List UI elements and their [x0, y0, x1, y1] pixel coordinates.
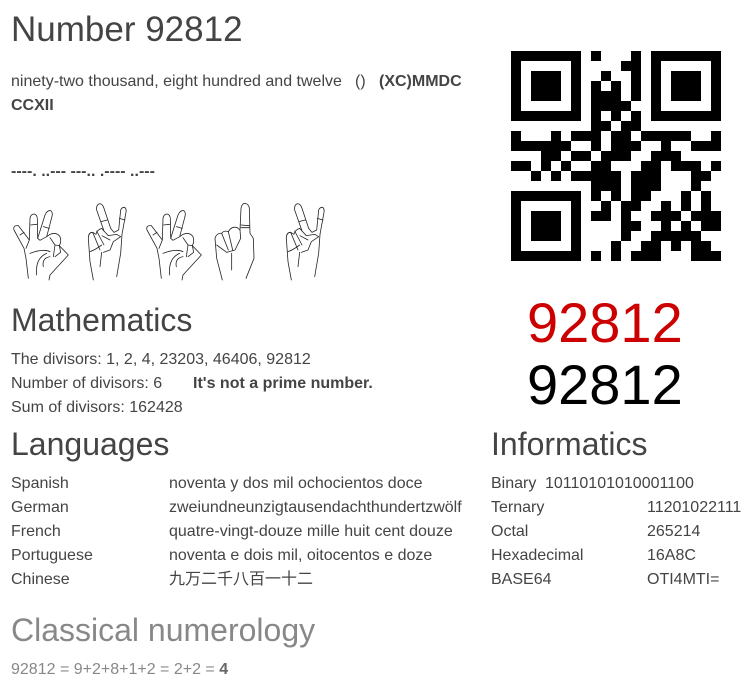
informatics table: Hexadecimal [491, 547, 583, 564]
informatics table: Ternary [491, 499, 544, 516]
large number red: 92812 [527, 291, 683, 354]
hand: two [286, 204, 324, 280]
informatics table: Binary [491, 475, 536, 492]
number in words and roman numeral [11, 73, 462, 114]
hand: two [88, 204, 126, 280]
languages table: Portuguese [11, 547, 93, 564]
QR code [511, 51, 721, 261]
hand: nine [14, 211, 68, 280]
number in words and roman numeral: ninety-two thousand, eight hundred and twelve [11, 73, 342, 90]
numerology calculation: 92812 = 9+2+8+1+2 = 2+2 = 4 [11, 661, 228, 678]
languages table: quatre-vingt-douze mille huit cent douze [169, 523, 453, 540]
languages table: noventa e dois mil, oitocentos e doze [169, 547, 432, 564]
heading: mathematics: Mathematics [11, 302, 192, 338]
mathematics facts: It's not a prime number. [193, 375, 373, 392]
informatics table [491, 475, 741, 588]
informatics table: Octal [491, 523, 528, 540]
mathematics facts: The divisors: 1, 2, 4, 23203, 46406, 92812 [11, 351, 311, 368]
number in words and roman numeral: () [355, 73, 366, 90]
languages table: German [11, 499, 69, 516]
morse code: ----. ..--- ---.. .---- ..--- [11, 163, 155, 180]
mathematics facts [11, 351, 373, 416]
informatics table: BASE64 [491, 571, 551, 588]
hand: eight [147, 211, 201, 280]
informatics table: OTI4MTI= [647, 571, 719, 588]
languages table: Chinese [11, 571, 70, 588]
sign language hands [13, 202, 325, 280]
hand: one [215, 203, 254, 280]
mathematics facts: Number of divisors: 6 [11, 375, 162, 392]
heading: informatics: Informatics [491, 426, 647, 462]
languages table [11, 475, 462, 588]
languages table: Spanish [11, 475, 69, 492]
heading: classical numerology: Classical numerology [11, 612, 315, 648]
heading: languages: Languages [11, 426, 169, 462]
languages table: 九万二千八百一十二 [169, 571, 313, 588]
languages table: French [11, 523, 61, 540]
languages table: noventa y dos mil ochocientos doce [169, 475, 422, 492]
informatics table: 265214 [647, 523, 700, 540]
informatics table: 10110101010001100 [545, 475, 694, 492]
number in words and roman numeral: (XC)MMDC [379, 73, 462, 90]
number in words and roman numeral: CCXII [11, 97, 54, 114]
informatics table: 16A8C [647, 547, 696, 564]
mathematics facts: Sum of divisors: 162428 [11, 399, 183, 416]
languages table: zweiundneunzigtausendachthundertzwölf [169, 499, 462, 516]
large number black: 92812 [527, 353, 683, 416]
informatics table: 11201022111 [647, 499, 741, 516]
title: Number 92812 [11, 10, 243, 49]
